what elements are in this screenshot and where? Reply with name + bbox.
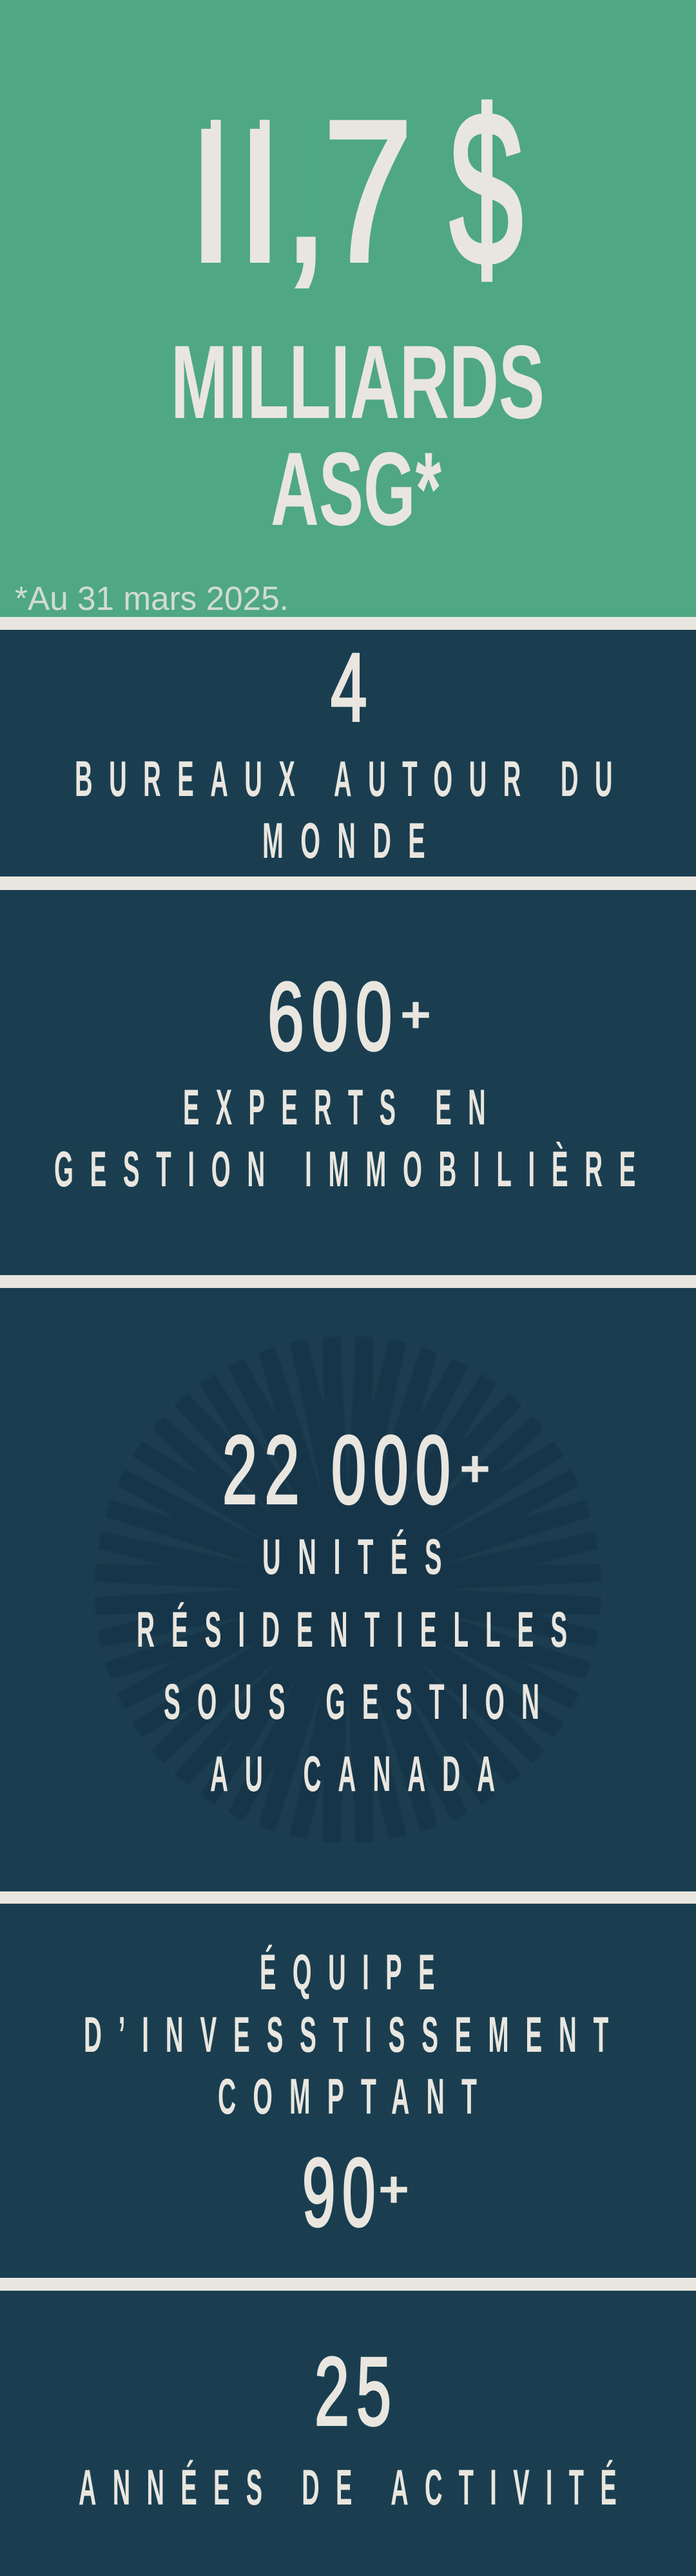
panel: experts bbox=[0, 890, 696, 1275]
number: 22 000+: + bbox=[459, 1440, 490, 1497]
panel: years of activity bbox=[0, 2291, 696, 2576]
label: unités résidentielles sous gestion au canada bbox=[137, 1528, 584, 1802]
panel: cash investment team bbox=[0, 1904, 696, 2278]
panel: assets under management bbox=[0, 0, 696, 618]
number: 600+: + bbox=[400, 986, 431, 1043]
number: 90+: 90 bbox=[302, 2138, 382, 2246]
number: 22 000+: 22 000 bbox=[222, 1416, 458, 1524]
number: 25: 25 bbox=[314, 2337, 398, 2445]
icon: sunburst bbox=[92, 1333, 604, 1846]
number: 4: 4 bbox=[331, 633, 374, 741]
panel: offices bbox=[0, 630, 696, 876]
label: équipe d'investissement comptant bbox=[84, 1944, 625, 2125]
heading number: 11,7 $: ,7 bbox=[284, 79, 412, 303]
label: bureaux autour du monde: MONDE bbox=[262, 812, 442, 869]
heading number: 11,7 $ bbox=[155, 66, 523, 311]
label: bureaux autour du monde bbox=[75, 750, 629, 869]
number: 90+: + bbox=[378, 2161, 409, 2218]
label: unités résidentielles sous gestion au canada: UNITÉS bbox=[262, 1528, 459, 1585]
panel: residential units bbox=[0, 1288, 696, 1891]
heading: ASG: ASG* bbox=[271, 431, 441, 547]
footnote: *Au 31 mars 2025. bbox=[15, 580, 289, 618]
heading number: 11,7 $: $ bbox=[450, 66, 523, 311]
label: équipe d'investissement comptant: ÉQUIPE bbox=[260, 1944, 451, 2000]
label: experts en gestion immobilière bbox=[54, 1079, 652, 1197]
number: 600+: 600 bbox=[267, 962, 400, 1070]
heading number: 11,7 $: 11 bbox=[163, 79, 302, 303]
